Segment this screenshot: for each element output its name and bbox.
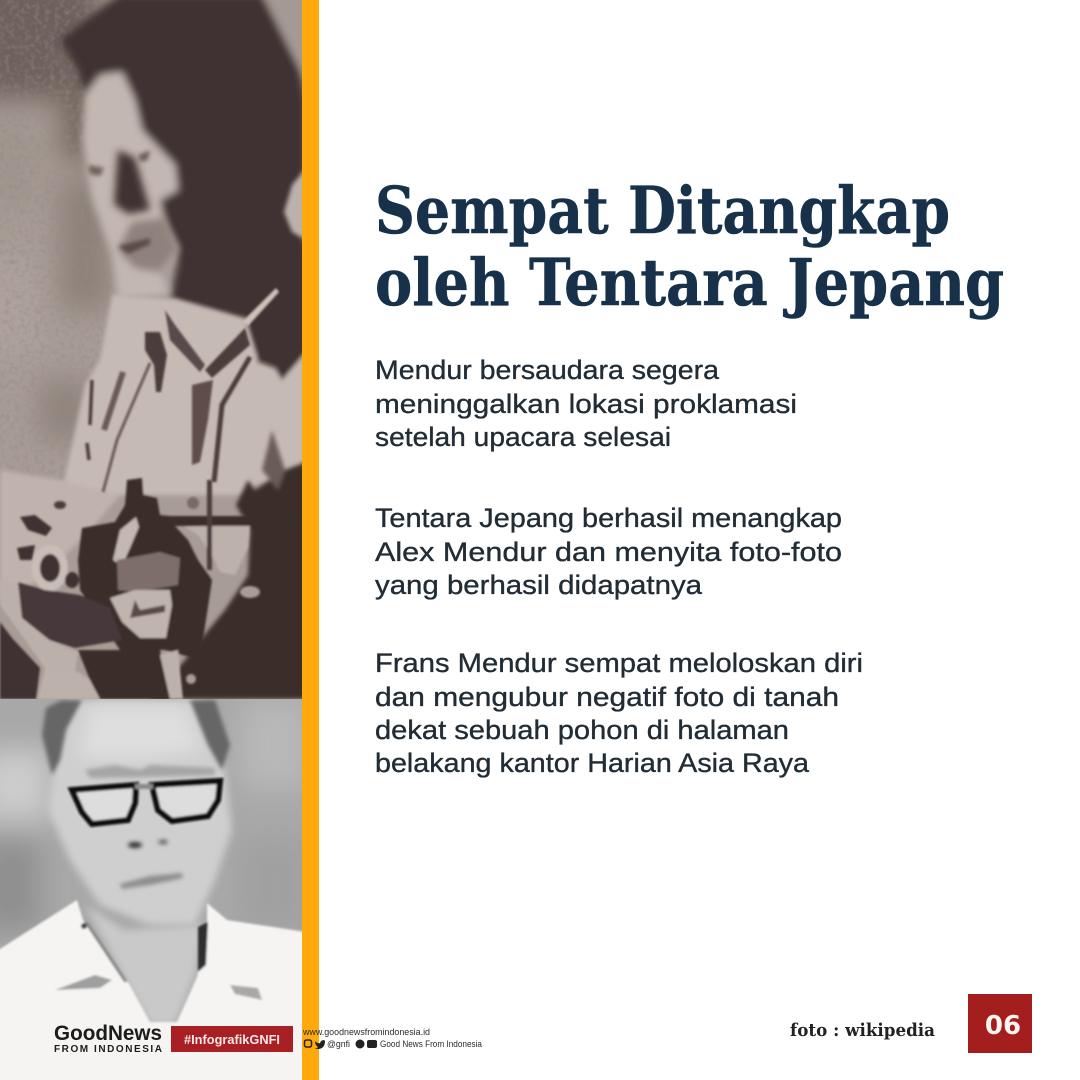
hashtag badge bbox=[171, 1026, 293, 1052]
text block: Frans Mendur escaped: dan mengubur negatif foto di tanah bbox=[375, 682, 839, 712]
text block: Alex Mendur captured: Tentara Jepang berhasil menangkap bbox=[375, 503, 842, 533]
yellow vertical bar bbox=[302, 0, 319, 1080]
text block: Alex Mendur captured: yang berhasil didapatnya bbox=[375, 570, 703, 600]
eyeglasses bbox=[72, 781, 220, 824]
logo: GoodNews From Indonesia: GoodNews bbox=[54, 1022, 162, 1045]
website and social handles bbox=[302, 1027, 482, 1049]
top right background and ear bbox=[262, 0, 306, 78]
text block: leaving the proclamation site bbox=[375, 355, 797, 452]
logo: GoodNews From Indonesia: FROM INDONESIA bbox=[54, 1044, 162, 1055]
icon: facebook bbox=[356, 1040, 364, 1048]
text block: Frans Mendur escaped: belakang kantor Harian Asia Raya bbox=[375, 748, 810, 778]
icon: youtube bbox=[367, 1040, 377, 1048]
text block: leaving the proclamation site: meninggalkan lokasi proklamasi bbox=[375, 389, 797, 419]
text block: Frans Mendur escaped: Frans Mendur sempat meloloskan diri bbox=[375, 648, 863, 678]
camera and hands bbox=[0, 476, 262, 699]
photo credit: foto : wikipedia bbox=[790, 1020, 935, 1041]
text block: Frans Mendur escaped: dekat sebuah pohon di halaman bbox=[375, 715, 789, 745]
text block: Alex Mendur captured: Alex Mendur dan menyita foto-foto bbox=[375, 537, 842, 567]
photo: Alex Mendur holding a camera bbox=[0, 0, 306, 699]
shirt collar bbox=[242, 288, 279, 326]
title: Sempat Ditangkap bbox=[375, 173, 950, 249]
white shirt bbox=[0, 900, 306, 1080]
icon: instagram bbox=[304, 1040, 312, 1047]
lit forehead and cheek bbox=[82, 72, 178, 300]
page number badge bbox=[968, 994, 1032, 1053]
hair and shaded side of the face bbox=[58, 0, 302, 377]
text block: Alex Mendur captured bbox=[375, 503, 842, 600]
photo: Frans Mendur wearing glasses bbox=[0, 699, 310, 1080]
title bbox=[375, 173, 1004, 321]
logo: GoodNews From Indonesia bbox=[54, 1022, 162, 1055]
text block: Frans Mendur escaped bbox=[375, 648, 863, 778]
dark torso on the right bbox=[150, 462, 306, 699]
icon: twitter bbox=[315, 1040, 325, 1049]
text block: leaving the proclamation site: setelah upacara selesai bbox=[375, 422, 671, 452]
website and social handles: www.goodnewsfromindonesia.id bbox=[302, 1027, 430, 1037]
website and social handles: Good News From Indonesia bbox=[380, 1039, 482, 1049]
hashtag badge: #InfografikGNFI bbox=[184, 1032, 280, 1047]
text block: leaving the proclamation site: Mendur bersaudara segera bbox=[375, 355, 720, 385]
website and social handles: @gnfi bbox=[327, 1039, 350, 1049]
page number badge: 06 bbox=[985, 1011, 1021, 1041]
